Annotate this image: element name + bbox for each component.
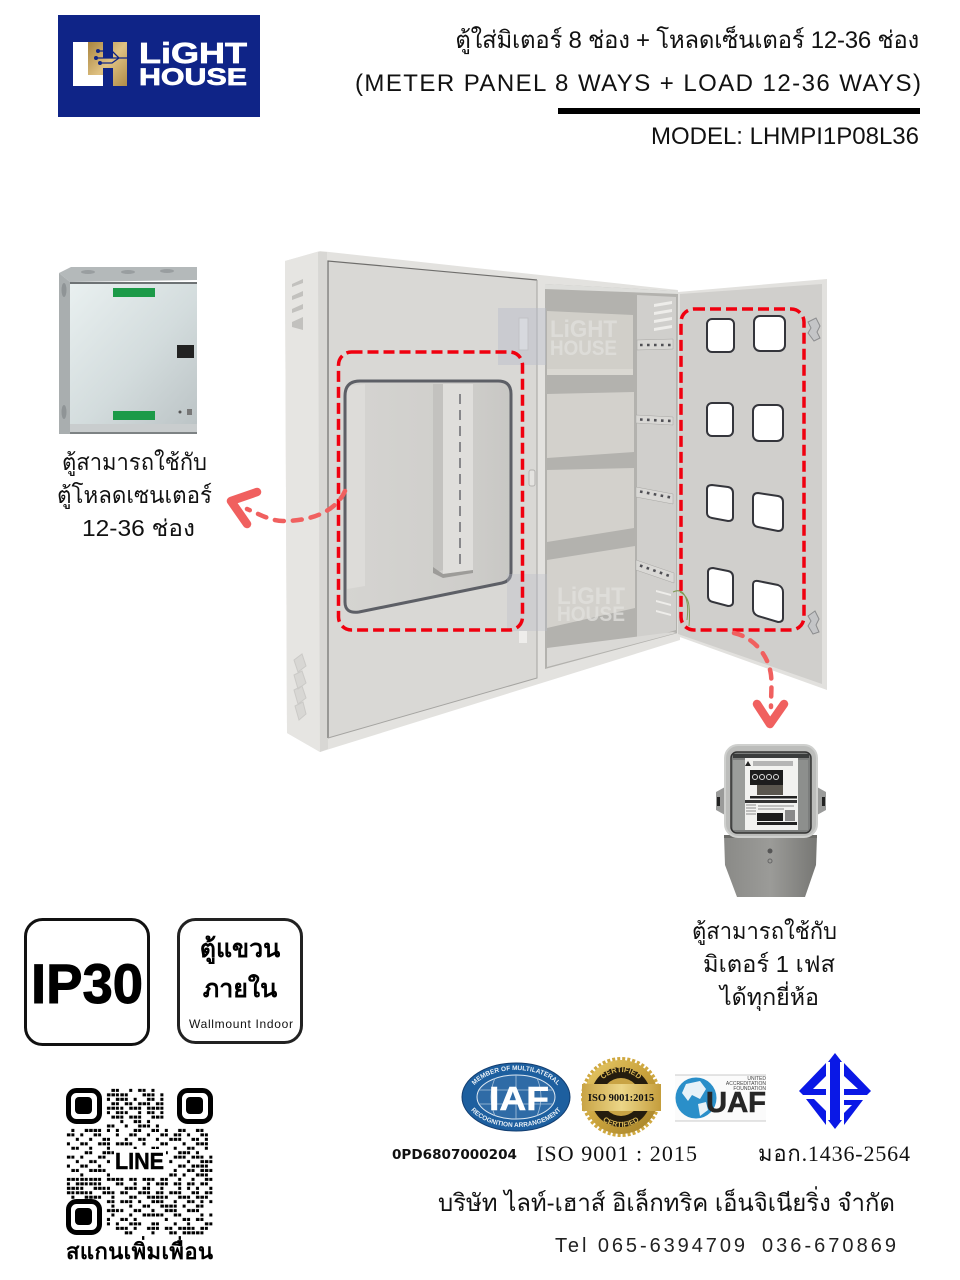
watermark: Light House: HOUSE (557, 603, 625, 626)
telephone numbers: Tel 065-6394709 (555, 1235, 745, 1257)
open door with 8 meter windows (673, 279, 827, 690)
logo: Light House: HOUSE (139, 64, 247, 91)
certification: ISO 9001 seal: CERTIFIED (600, 1067, 641, 1078)
certification labels (392, 1141, 910, 1166)
caption: scan to add friend: สแกนเพิ่มเพื่อน (66, 1235, 213, 1264)
certification: UAF: UNITED (747, 1076, 766, 1082)
certification labels: มอก.1436-2564 (758, 1141, 910, 1166)
QR code: LINE: LINE (115, 1148, 164, 1174)
watermark: Light House: HOUSE (550, 337, 617, 360)
red dashed highlight: meter windows (681, 309, 804, 630)
badge: wallmount indoor: ตู้แขวน (200, 935, 280, 965)
product: meter panel cabinet (285, 251, 827, 752)
watermark: Light House: LiGHT (550, 316, 617, 343)
caption: load center: ตู้โหลดเซนเตอร์ (57, 482, 212, 509)
certification: UAF (675, 1075, 766, 1121)
certification labels: 0PD6807000204 (392, 1148, 517, 1163)
red dashed highlight: window (338, 352, 522, 630)
certification: UAF: UAF (706, 1087, 766, 1119)
interior with trays and rails (545, 284, 678, 669)
title block: MODEL: LHMPI1P08L36 (651, 123, 919, 150)
arrow: window to load center (231, 491, 345, 524)
certification: UAF: FOUNDATION (733, 1086, 766, 1092)
certification labels: ISO 9001 : 2015 (536, 1141, 697, 1166)
certification: TIS mark (799, 1053, 871, 1129)
watermark: Light House: LiGHT (557, 583, 625, 610)
caption: load center: 12-36 ช่อง (82, 515, 195, 541)
certification: UAF: ACCREDITATION (726, 1081, 766, 1087)
logo: Light House: LiGHT (139, 38, 247, 70)
caption: load center: ตู้สามารถใช้กับ (62, 449, 207, 476)
title block: (METER PANEL 8 WAYS + LOAD 12-36 WAYS) (355, 70, 921, 97)
left door with window (328, 261, 537, 738)
badge: wallmount indoor (178, 920, 302, 1042)
badge: IP30 (26, 920, 148, 1044)
title block (355, 25, 921, 150)
telephone numbers: 036-670869 (762, 1235, 896, 1257)
product: electric meter (716, 745, 826, 897)
certification: IAF (462, 1062, 570, 1132)
certification: ISO 9001 seal (581, 1057, 661, 1137)
certification: ISO 9001 seal: CERTIFIED (604, 1117, 638, 1127)
company name: บริษัท ไลท์-เฮาส์ อิเล็กทริค เอ็นจิเนียริ่ง จำกัด (438, 1186, 895, 1217)
QR code: LINE (66, 1088, 213, 1235)
arrow: meter windows to meter (734, 633, 784, 724)
badge: wallmount indoor: ภายใน (203, 973, 277, 1003)
certification: IAF: RECOGNITION ARRANGEMENT (471, 1107, 560, 1127)
title block: ตู้ใส่มิเตอร์ 8 ช่อง + โหลดเซ็นเตอร์ 12-36 ช่อง (455, 25, 919, 55)
watermark: Light House (498, 308, 625, 631)
caption: meter: มิเตอร์ 1 เฟส (703, 951, 835, 977)
caption: meter: ตู้สามารถใช้กับ (692, 918, 837, 945)
badge: wallmount indoor: Wallmount Indoor (189, 1017, 293, 1031)
product: load center cabinet (59, 267, 197, 434)
caption: meter (692, 918, 837, 1011)
badge: IP30: IP30 (31, 952, 143, 1015)
certification: ISO 9001 seal: ISO 9001:2015 (588, 1093, 654, 1104)
caption: meter: ได้ทุกยี่ห้อ (718, 981, 819, 1011)
cabinet body (285, 251, 680, 752)
caption: load center (57, 449, 212, 541)
certification: IAF: MEMBER OF MULTILATERAL (472, 1066, 559, 1086)
telephone numbers (555, 1235, 896, 1257)
logo: Light House (58, 15, 260, 117)
certification: IAF: IAF (489, 1080, 549, 1117)
